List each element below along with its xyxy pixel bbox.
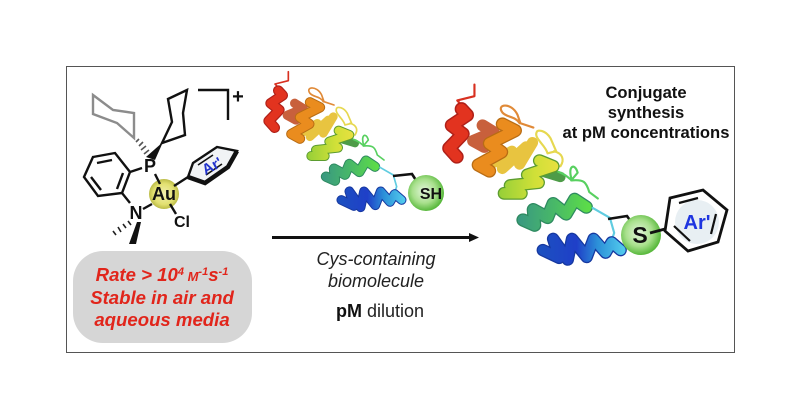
benzene ring [84, 153, 142, 203]
title [563, 83, 729, 142]
callout: properties: s [208, 264, 219, 285]
icon: aryl ring [188, 147, 237, 183]
atom labels: Au [152, 184, 176, 204]
icon: gray cyclohexyl [93, 95, 134, 138]
protein: conjugate [449, 85, 727, 260]
callout: properties [73, 251, 252, 343]
icon: aryl ring: Ar' [199, 154, 225, 179]
callout: properties: Rate > 10 [96, 264, 178, 285]
callout: properties: aqueous media [94, 309, 230, 330]
atom labels: Cl [174, 214, 190, 231]
callout: properties: Stable in air and [90, 287, 234, 308]
arrow [272, 233, 479, 242]
bonds [143, 174, 188, 214]
reaction conditions [316, 249, 436, 321]
protein: with thiol [269, 72, 444, 211]
icon: black cyclohexyl [136, 90, 187, 160]
title: at pM concentrations [563, 123, 729, 142]
reaction conditions: pM dilution [336, 301, 424, 321]
gold complex structure [84, 86, 244, 244]
icon: aryl ring product: Ar' [684, 212, 710, 234]
reaction conditions: Cys-containing [316, 249, 436, 269]
icon: sulfur sphere [621, 215, 661, 255]
icon: aryl ring product [650, 190, 727, 251]
callout: properties: 4 [177, 266, 184, 278]
icon: thiol sphere: SH [420, 186, 442, 203]
icon: charge bracket [198, 86, 244, 120]
callout: properties: -1 [198, 266, 208, 278]
icon: charge bracket: + [232, 86, 244, 108]
callout: properties: -1 [219, 266, 228, 278]
reaction conditions: biomolecule [328, 271, 424, 291]
atom labels: N [130, 203, 142, 223]
callout: properties: M [184, 269, 200, 284]
atom labels [130, 156, 190, 231]
icon: thiol sphere [408, 175, 444, 211]
title: synthesis [608, 103, 684, 122]
icon: sulfur sphere: S [632, 222, 648, 248]
icon: gold atom [149, 179, 179, 209]
frame [66, 66, 734, 352]
methyl groups on nitrogen [113, 221, 141, 244]
atom labels: P [144, 156, 156, 176]
title: Conjugate [605, 83, 687, 102]
